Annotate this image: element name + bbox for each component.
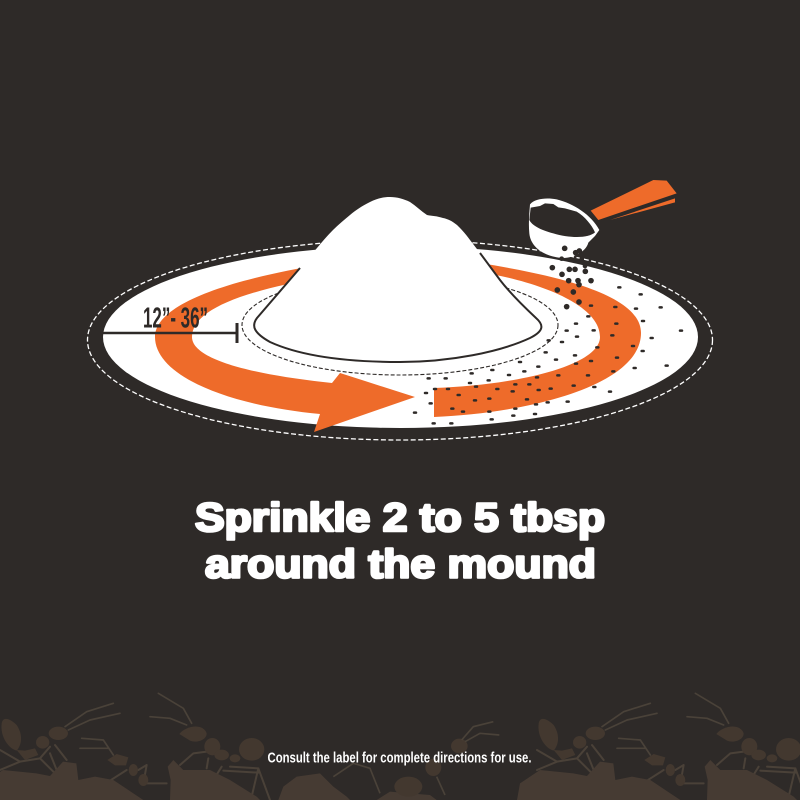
inner dashed ring around mound [242,275,558,375]
scattered bait granules [414,287,682,423]
mound of bait [254,197,541,362]
heading: around the mound [205,542,596,586]
white ground disc [103,246,698,428]
measurement line with label [103,302,237,343]
icon: scoop pouring bait [529,180,677,309]
heading [195,496,605,586]
heading: Sprinkle 2 to 5 tbsp [195,496,605,540]
orange arrow: left sweep [155,264,415,432]
orange band: right sweep [434,263,641,417]
ant silhouettes along the bottom [0,693,800,800]
measurement line with label: 12”- 36” [143,302,208,334]
footer note: Consult the label for complete directions for use. [268,750,532,766]
outer dashed ring [88,240,712,440]
